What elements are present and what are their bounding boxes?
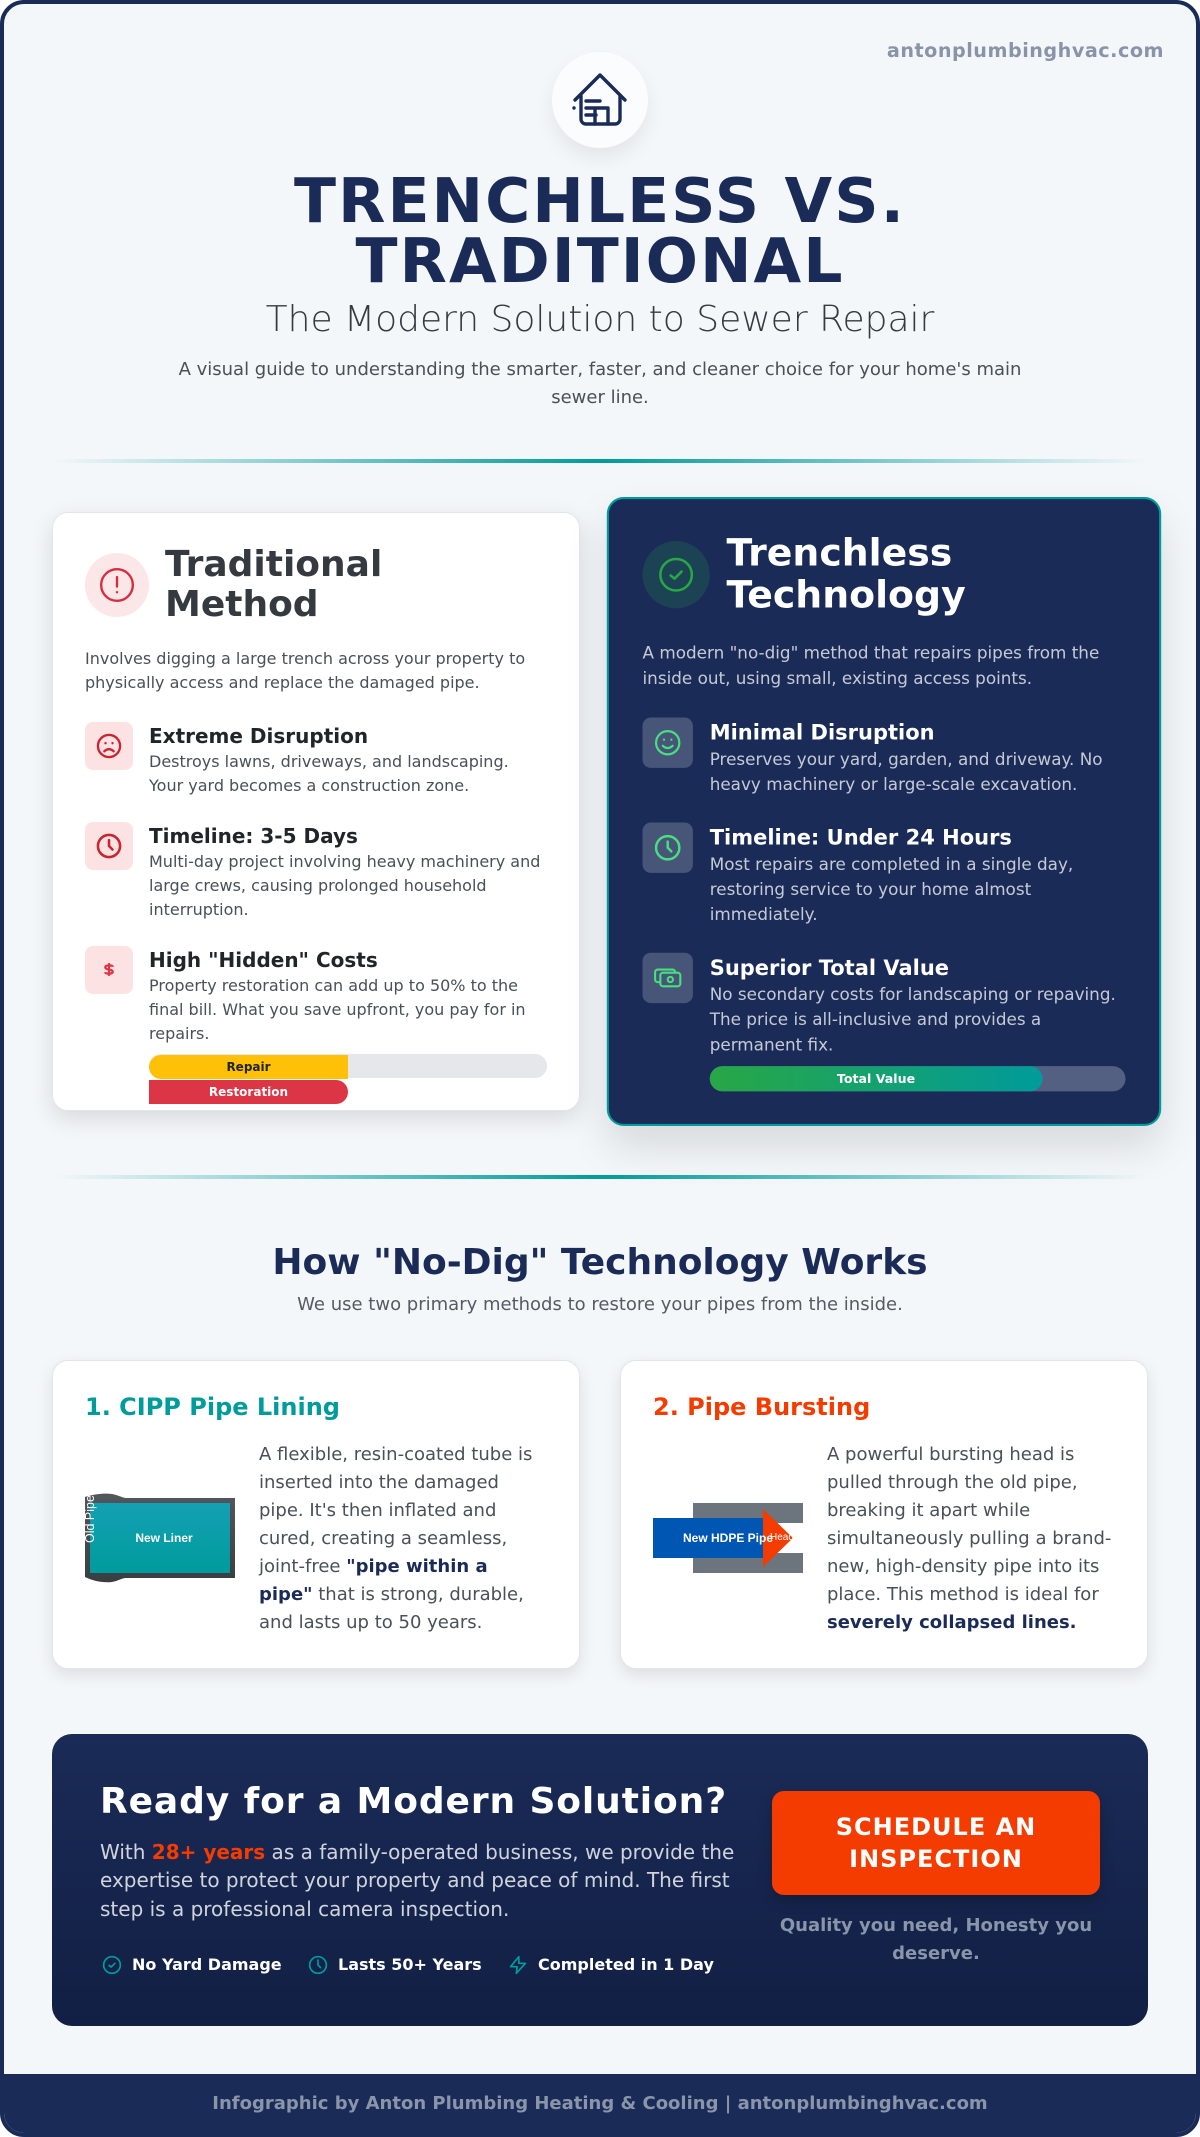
item: timeline under 24 hours: Most repairs are completed in a single day, xyxy=(710,854,1073,873)
panel: traditional method xyxy=(52,512,580,1110)
trenchless description xyxy=(642,642,1099,688)
bar segment: restoration: Restoration xyxy=(209,1085,288,1099)
trenchless description: A modern "no-dig" method that repairs pipes from the xyxy=(643,642,1099,662)
trenchless description: inside out, using small, existing access points. xyxy=(643,668,1032,688)
bursting explanation: pulled through the old pipe, xyxy=(827,1472,1078,1493)
item: minimal disruption xyxy=(642,718,1103,794)
item: superior total value: permanent fix. xyxy=(710,1034,833,1054)
item: hidden costs: High "Hidden" Costs xyxy=(149,948,378,972)
item: minimal disruption: heavy machinery or large-scale excavation. xyxy=(710,774,1077,794)
CIPP explanation: joint-free "pipe within a xyxy=(259,1556,488,1577)
pipe casing with bulge xyxy=(85,1494,235,1582)
item: extreme disruption xyxy=(85,722,509,794)
CIPP explanation: A flexible, resin-coated tube is xyxy=(259,1444,532,1465)
item: timeline under 24 hours: immediately. xyxy=(710,904,818,924)
traditional description: physically access and replace the damaged pipe. xyxy=(85,672,480,692)
traditional description xyxy=(85,648,525,692)
panel: CIPP pipe lining xyxy=(52,1360,580,1669)
item: timeline under 24 hours: Timeline: Under 24 Hours xyxy=(710,824,1012,849)
CIPP explanation: pipe. It's then inflated and xyxy=(259,1500,496,1521)
trenchless heading xyxy=(642,531,966,616)
item: timeline 3-5 days: Timeline: 3-5 Days xyxy=(149,824,358,848)
footer xyxy=(0,2074,1200,2137)
title: TRENCHLESS VS. xyxy=(294,165,906,237)
CTA text: expertise to protect your property and peace of mind. The first xyxy=(100,1868,730,1892)
badge: no yard damage: No Yard Damage xyxy=(132,1955,282,1974)
panel: call to action xyxy=(52,1734,1148,2026)
item: superior total value xyxy=(642,952,1126,1092)
website label: antonplumbinghvac.com xyxy=(887,39,1164,62)
bursting explanation: simultaneously pulling a brand- xyxy=(827,1528,1111,1549)
badge: completed in 1 day: Completed in 1 Day xyxy=(538,1955,714,1974)
subtitle: The Modern Solution to Sewer Repair xyxy=(266,299,934,340)
bursting heading: 2. Pipe Bursting xyxy=(653,1393,870,1421)
button: schedule an inspection: SCHEDULE AN xyxy=(836,1813,1036,1841)
traditional heading: Traditional xyxy=(165,544,382,584)
item: timeline 3-5 days xyxy=(85,822,540,918)
diagram: CIPP pipe xyxy=(83,1494,235,1582)
panel: pipe bursting xyxy=(620,1360,1148,1669)
button: schedule an inspection xyxy=(772,1791,1100,1895)
item: extreme disruption: Destroys lawns, driveways, and landscaping. xyxy=(149,752,509,770)
bar segment: restoration xyxy=(149,1080,348,1104)
item: superior total value: Superior Total Value xyxy=(710,954,949,980)
item: timeline under 24 hours: restoring service to your home almost xyxy=(710,879,1031,899)
CIPP heading: 1. CIPP Pipe Lining xyxy=(85,1393,340,1421)
item: minimal disruption: Minimal Disruption xyxy=(710,719,935,744)
intro text: sewer line. xyxy=(551,387,649,408)
item: superior total value: No secondary costs for landscaping or repaving. xyxy=(710,984,1116,1004)
CIPP explanation: and lasts up to 50 years. xyxy=(259,1612,482,1633)
icon: house logo xyxy=(552,52,648,148)
value bar xyxy=(710,1066,1126,1091)
label: new HDPE pipe: New HDPE Pipe xyxy=(683,1531,773,1545)
diagram: pipe bursting xyxy=(653,1503,803,1573)
trenchless heading: Technology xyxy=(727,573,966,616)
item: timeline 3-5 days: interruption. xyxy=(149,900,249,918)
section subheading: We use two primary methods to restore your pipes from the inside. xyxy=(297,1294,903,1315)
item: timeline under 24 hours xyxy=(642,822,1073,924)
bursting explanation: place. This method is ideal for xyxy=(827,1584,1099,1605)
intro text xyxy=(178,359,1021,408)
item: hidden costs: Property restoration can add up to 50% to the xyxy=(149,976,518,994)
traditional heading xyxy=(85,544,382,624)
item: extreme disruption: Extreme Disruption xyxy=(149,724,368,748)
CTA text: step is a professional camera inspection. xyxy=(100,1897,509,1921)
item: hidden costs xyxy=(85,946,526,1042)
CIPP explanation: pipe" that is strong, durable, xyxy=(259,1584,524,1605)
item: hidden costs: final bill. What you save upfront, you pay for in xyxy=(149,1000,526,1018)
item: superior total value: The price is all-inclusive and provides a xyxy=(710,1009,1041,1029)
CIPP explanation xyxy=(258,1444,532,1633)
item: hidden costs: repairs. xyxy=(149,1024,209,1042)
badge: lasts 50+ years: Lasts 50+ Years xyxy=(338,1955,482,1974)
cost bar: repair and restoration xyxy=(149,1054,547,1104)
footer: Infographic by Anton Plumbing Heating & Cooling | antonplumbinghvac.com xyxy=(212,2093,988,2114)
label: new liner: New Liner xyxy=(135,1531,193,1545)
title: TRADITIONAL xyxy=(356,225,844,297)
title xyxy=(294,165,906,297)
label: old pipe: Old Pipe xyxy=(83,1495,97,1543)
traditional description: Involves digging a large trench across your property to xyxy=(85,648,525,668)
tagline xyxy=(780,1915,1092,1964)
button: schedule an inspection: INSPECTION xyxy=(849,1845,1023,1873)
CTA text xyxy=(100,1840,734,1921)
item: minimal disruption: Preserves your yard, garden, and driveway. No xyxy=(710,749,1103,768)
bursting explanation xyxy=(827,1444,1111,1633)
CIPP explanation: cured, creating a seamless, xyxy=(259,1528,507,1549)
bursting explanation: severely collapsed lines. xyxy=(827,1612,1077,1633)
bar segment: repair: Repair xyxy=(226,1060,271,1074)
tagline: deserve. xyxy=(892,1943,980,1964)
panel: trenchless technology xyxy=(607,497,1161,1125)
item: timeline 3-5 days: Multi-day project involving heavy machinery and xyxy=(149,852,540,870)
intro text: A visual guide to understanding the smarter, faster, and cleaner choice for your home's main xyxy=(179,359,1021,380)
bar segment: repair xyxy=(149,1055,348,1079)
value bar: Total Value xyxy=(837,1071,915,1086)
bursting explanation: breaking it apart while xyxy=(827,1500,1030,1521)
CTA text: With 28+ years as a family-operated business, we provide the xyxy=(100,1840,734,1864)
bursting explanation: A powerful bursting head is xyxy=(827,1444,1074,1465)
CIPP explanation: inserted into the damaged xyxy=(259,1472,499,1493)
traditional heading: Method xyxy=(165,584,319,624)
section heading: how it works: How "No-Dig" Technology Works xyxy=(272,1242,928,1283)
trenchless heading: Trenchless xyxy=(727,531,952,574)
item: timeline 3-5 days: large crews, causing prolonged household xyxy=(149,876,487,894)
item: extreme disruption: Your yard becomes a construction zone. xyxy=(149,776,469,794)
bursting explanation: new, high-density pipe into its xyxy=(827,1556,1099,1577)
CTA heading: Ready for a Modern Solution? xyxy=(100,1781,727,1822)
tagline: Quality you need, Honesty you xyxy=(780,1915,1092,1936)
